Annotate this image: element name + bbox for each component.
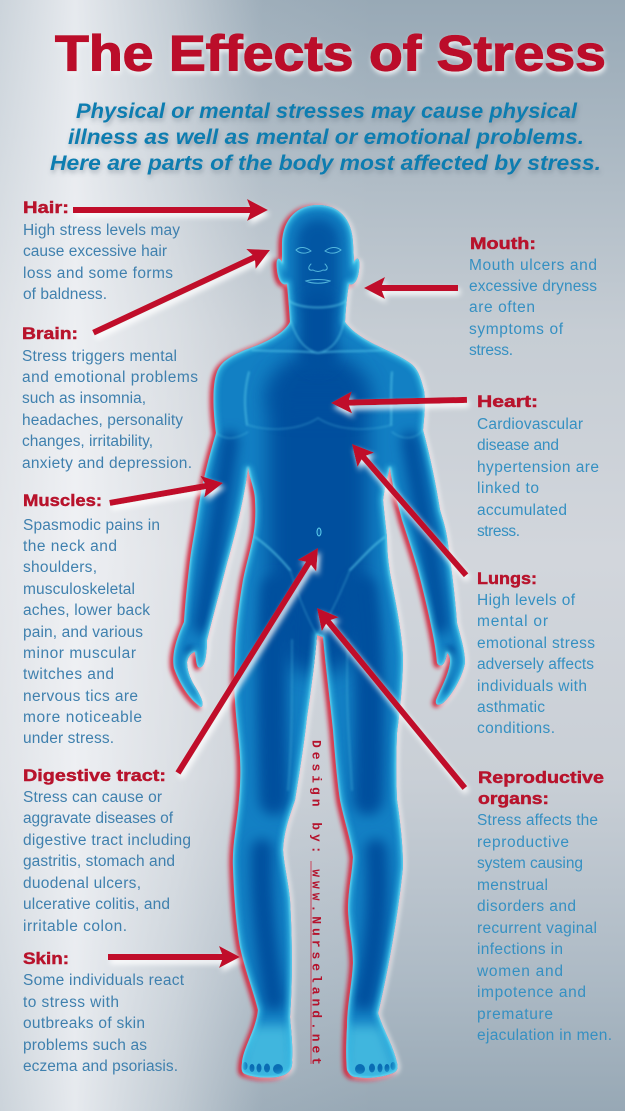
muscle definition lines [216,300,423,790]
text: reproductive organs: impotence and [477,984,586,1001]
text: muscles: the neck and [23,538,117,555]
subtitle: Here are parts of the body most affected by stress. [50,151,601,175]
heading: heart: Heart: [477,392,538,411]
text: reproductive organs: infections in [477,941,563,958]
text: brain: changes, irritability, [22,433,153,450]
subtitle: illness as well as mental or emotional problems. [68,125,584,149]
text: heart [477,416,599,540]
arrow: mouth [364,277,458,299]
text: mouth: excessive dryness [469,278,597,295]
heading: mouth: Mouth: [470,234,536,253]
muscle shading [190,240,450,1000]
text: muscles: under stress. [23,730,114,747]
text: digestive tract [23,789,191,935]
text: brain: Stress triggers mental [22,348,177,365]
text: muscles: shoulders, [23,559,97,576]
text: hair: cause excessive hair [23,243,167,260]
text: reproductive organs: reproductive [477,834,569,851]
arrow: reproductive organs [308,601,473,795]
toes [242,1062,396,1074]
text: brain: such as insomnia, [22,390,146,407]
heading: lungs: Lungs: [477,569,537,588]
text: muscles: nervous tics are [23,688,138,705]
arrow: digestive tract [169,542,327,779]
heading: reproductive organs [478,768,604,808]
text: reproductive organs [476,812,612,1044]
text: brain [22,348,198,472]
panel: skin [23,949,185,1075]
text: reproductive organs: Stress affects the [477,812,598,829]
panel: muscles [23,491,160,747]
text: digestive tract: irritable colon. [23,918,127,935]
text: muscles: musculoskeletal [23,581,135,598]
text: brain: and emotional problems [22,369,198,386]
text: lungs: emotional stress [477,635,595,652]
text: skin: eczema and psoriasis. [23,1058,178,1075]
text: reproductive organs: women and [476,963,563,980]
text: digestive tract: ulcerative colitis, and [23,896,170,913]
text: heart: linked to [477,480,539,497]
arrow: hair [73,199,268,221]
text: hair [23,222,180,303]
panel: mouth [469,234,597,359]
edge glow [173,205,465,1078]
panel: lungs [477,569,595,737]
heading: digestive tract: Digestive tract: [23,766,166,785]
text: reproductive organs: premature [477,1006,553,1023]
text: lungs: adversely affects [477,656,594,673]
text: hair: of baldness. [23,286,107,303]
heading: brain: Brain: [22,324,78,343]
text: digestive tract: aggravate diseases of [23,810,174,827]
text: hair: High stress levels may [23,222,180,239]
panel: reproductive organs [476,768,612,1044]
navel [317,528,321,536]
heading: reproductive organs: Reproductive [478,768,604,787]
heading: skin: Skin: [23,949,69,968]
text: reproductive organs: ejaculation in men. [477,1027,612,1044]
text: skin: Some individuals react [23,972,185,989]
text: lungs [477,592,595,737]
heading: hair: Hair: [23,198,69,217]
panel: hair [23,198,180,303]
text: muscles: minor muscular [23,645,136,662]
panel: heart [477,392,599,540]
text: mouth: are often [469,299,535,316]
arrow: skin [108,946,240,968]
text: skin: outbreaks of skin [23,1015,145,1032]
text: digestive tract: duodenal ulcers, [23,875,141,892]
panel: digestive tract [23,766,191,935]
text: lungs: asthmatic [477,699,545,716]
text: brain: anxiety and depression. [22,455,192,472]
panel: brain [22,324,198,472]
text: muscles: pain, and various [23,624,143,641]
design credit: Design by: www.Nurseland.net [308,740,324,1065]
arrow: muscles [108,472,225,514]
text: skin: to stress with [23,994,119,1011]
text: lungs: conditions. [477,720,555,737]
arrow: brain [89,240,275,343]
text: heart: Cardiovascular [477,416,583,433]
text: muscles: more noticeable [23,709,142,726]
text: muscles: twitches and [23,666,114,683]
subtitle [50,99,601,175]
text: digestive tract: gastritis, stomach and [23,853,175,870]
heading: reproductive organs: organs: [478,789,549,808]
human body figure [160,195,480,1095]
text: digestive tract: digestive tract including [23,832,191,849]
feet highlights [238,1025,402,1080]
text: reproductive organs: system causing [477,855,583,872]
text: skin [23,972,185,1075]
text: mouth: stress. [469,342,513,359]
text: heart: hypertension are [477,459,599,476]
subtitle: Physical or mental stresses may cause physical [76,99,578,123]
text: heart: stress. [477,523,520,540]
text: lungs: mental or [477,613,548,630]
heading: muscles: Muscles: [23,491,102,510]
text: digestive tract: Stress can cause or [23,789,162,806]
text: lungs: High levels of [477,592,576,609]
text: lungs: individuals with [477,678,587,695]
text: muscles: aches, lower back [23,602,150,619]
text: mouth: Mouth ulcers and [469,257,597,274]
title: The Effects of Stress [55,26,606,82]
text: mouth: symptoms of [469,321,564,338]
red glow outline [171,206,467,1079]
text: reproductive organs: menstrual [477,877,548,894]
text: mouth [469,257,597,359]
text: reproductive organs: recurrent vaginal [477,920,597,937]
arrow: lungs [344,437,474,583]
arrow: heart [331,389,467,414]
text: skin: problems such as [23,1037,147,1054]
text: brain: headaches, personality [22,412,183,429]
text: heart: disease and [477,437,559,454]
body fill and shading [173,205,465,1078]
face features [296,247,341,283]
text: muscles [23,517,160,747]
text: reproductive organs: disorders and [477,898,576,915]
text: hair: loss and some forms [23,265,173,282]
text: muscles: Spasmodic pains in [23,517,160,534]
arrows [73,199,474,968]
text: heart: accumulated [477,502,567,519]
